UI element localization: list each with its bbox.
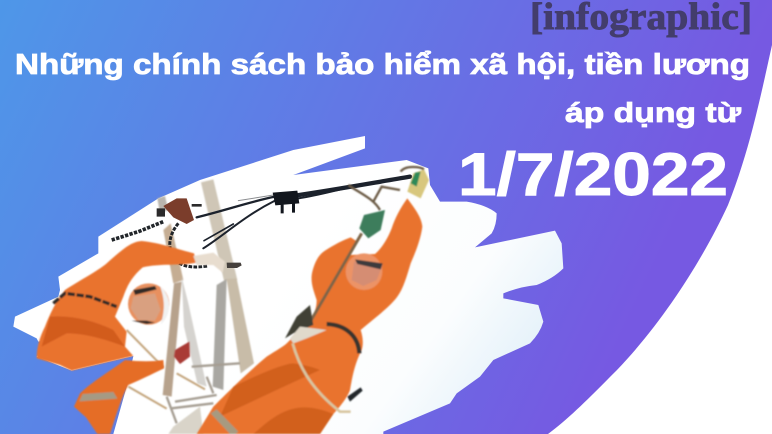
worker left	[37, 241, 225, 434]
harness	[327, 324, 359, 353]
left worker glove	[193, 253, 225, 273]
left worker red glove	[174, 342, 190, 364]
left worker lower leg	[74, 360, 164, 434]
white brush-stroke backdrop	[13, 136, 563, 434]
right worker helmet	[346, 253, 382, 290]
left worker arm and torso	[37, 241, 197, 371]
title line 2: áp dụng từ	[565, 97, 742, 128]
safety rope	[293, 343, 351, 412]
tool rod	[308, 233, 362, 325]
right worker lower glove	[359, 210, 385, 238]
cable bundle	[197, 177, 410, 248]
reflective stripe	[211, 409, 238, 434]
right worker top glove	[407, 169, 429, 198]
left worker face	[131, 293, 161, 321]
pylon structure	[157, 179, 254, 434]
left worker shadow folds	[42, 316, 125, 347]
date: 1/7/2022	[458, 141, 728, 208]
title line 1: Những chính sách bảo hiểm xã hội, tiền lương	[15, 49, 750, 81]
rope lines	[127, 330, 205, 409]
worker right	[197, 167, 429, 434]
hoist and chain	[112, 198, 242, 268]
right worker body	[197, 198, 422, 434]
left worker reflective stripe	[79, 392, 117, 401]
left worker helmet	[128, 283, 169, 325]
left worker harness	[53, 293, 117, 307]
belt tool	[347, 387, 363, 402]
cable connector	[273, 191, 299, 213]
photo: line workers on a pylon	[13, 136, 563, 434]
right worker shadow	[220, 363, 333, 434]
right worker face	[352, 262, 383, 286]
hook	[348, 167, 424, 210]
